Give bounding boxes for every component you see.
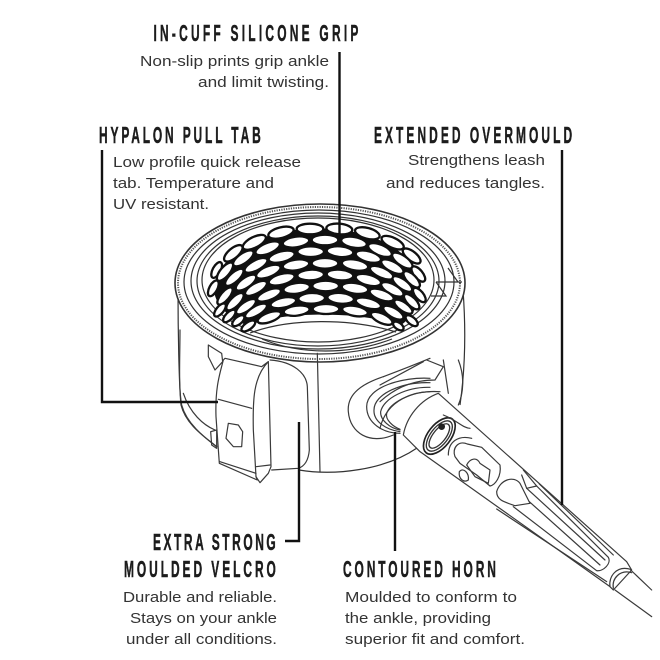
description: and reduces tangles. xyxy=(386,175,545,192)
leader line: pull tab xyxy=(102,150,218,402)
description: Moulded to conform to xyxy=(345,589,517,606)
label: in-cuff silicone grip xyxy=(140,20,358,91)
description xyxy=(113,154,301,213)
label: hypalon pull tab xyxy=(99,122,301,213)
pull tab xyxy=(216,358,268,480)
heading: CONTOURED HORN xyxy=(343,556,496,582)
cuff body outline xyxy=(178,290,465,472)
heading: MOULDED VELCRO xyxy=(124,556,276,582)
horn base contours xyxy=(348,377,393,439)
cuff rim rings xyxy=(175,204,465,362)
heading xyxy=(124,529,276,582)
description: Low profile quick release xyxy=(113,154,301,171)
description: Strengthens leash xyxy=(408,152,545,169)
leader line: horn xyxy=(394,432,396,551)
description xyxy=(386,152,545,192)
label: extended overmould xyxy=(374,122,572,192)
description xyxy=(123,589,277,648)
silicone grip pattern xyxy=(206,223,428,334)
channel head xyxy=(497,479,530,506)
swivel pin xyxy=(454,443,500,486)
description: superior fit and comfort. xyxy=(345,631,525,648)
moulded grooves xyxy=(513,486,609,571)
description xyxy=(345,589,525,648)
description: Durable and reliable. xyxy=(123,589,277,606)
description: the ankle, providing xyxy=(345,610,491,627)
heading: HYPALON PULL TAB xyxy=(99,122,261,148)
description xyxy=(140,53,329,91)
description: Stays on your ankle xyxy=(130,610,277,627)
description: and limit twisting. xyxy=(198,74,329,91)
heading: EXTRA STRONG xyxy=(153,529,276,555)
leader line: silicone grip xyxy=(338,52,341,234)
velcro patch xyxy=(270,360,309,470)
description: Non-slip prints grip ankle xyxy=(140,53,329,70)
description: under all conditions. xyxy=(126,631,277,648)
swivel cup xyxy=(417,412,472,460)
description: tab. Temperature and xyxy=(113,175,274,192)
end collar xyxy=(610,568,631,587)
tab slot xyxy=(226,423,243,447)
cuff seam xyxy=(317,353,320,472)
pull tab, velcro and horn base xyxy=(180,330,430,483)
label: contoured horn xyxy=(343,556,525,648)
leader line: overmould xyxy=(561,150,563,505)
heading: EXTENDED OVERMOULD xyxy=(374,122,572,148)
description: UV resistant. xyxy=(113,196,209,213)
tab fold xyxy=(256,362,271,483)
heading: IN-CUFF SILICONE GRIP xyxy=(154,20,358,46)
cone outline xyxy=(403,393,632,590)
label: extra strong moulded velcro xyxy=(123,529,277,648)
leash cord xyxy=(631,570,652,590)
leash cuff illustration xyxy=(175,204,652,617)
leash swivel and moulding xyxy=(380,360,652,617)
leader line: velcro xyxy=(285,422,299,541)
